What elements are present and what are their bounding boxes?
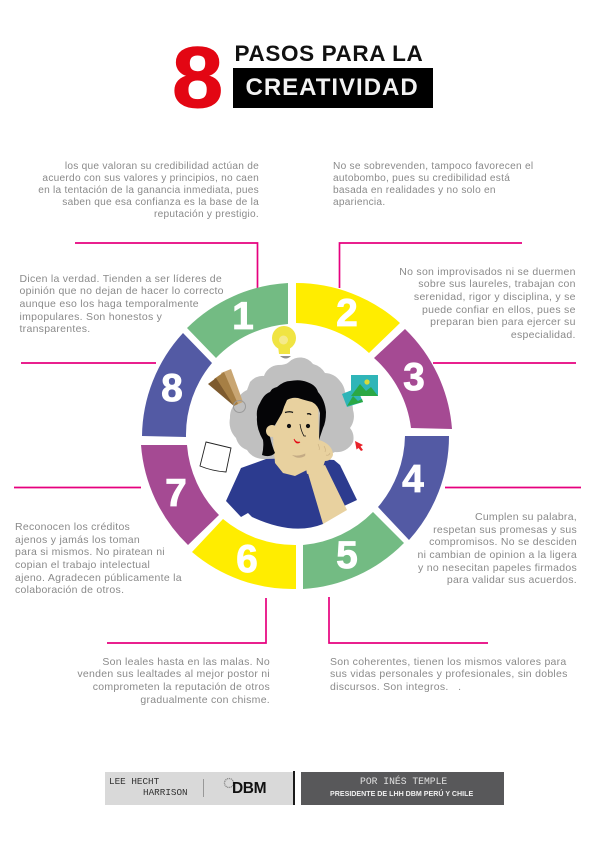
segment 6 <box>192 519 296 589</box>
segment 2 <box>296 283 400 353</box>
segment 8: 8 <box>161 367 183 410</box>
text: step 8: Dicen la verdad. Tienden a ser líderes de <box>20 272 222 284</box>
text: step 7: colaboración de otros. <box>15 584 124 596</box>
icon: red cursor <box>355 441 363 451</box>
mouth <box>294 439 300 443</box>
segment 7 <box>141 445 219 545</box>
text: step 8: transparentes. <box>20 323 90 335</box>
segment 6: 6 <box>236 538 258 581</box>
segment 3: 3 <box>403 356 425 399</box>
arm and fist <box>307 465 347 524</box>
text: step 6: Son leales hasta en las malas. No <box>102 656 270 668</box>
text: step 7: Reconocen los créditos <box>15 521 130 533</box>
nose <box>300 424 306 436</box>
segment 1 <box>187 283 288 358</box>
chin shadow <box>292 452 308 458</box>
icon: globe <box>224 778 234 788</box>
icon: blank paper <box>200 442 231 472</box>
icon: images <box>342 375 378 407</box>
text: step 3: serenidad, rigor y disciplina, y se <box>414 291 576 303</box>
face <box>273 398 319 456</box>
text: step 4: Cumplen su palabra, <box>475 511 577 523</box>
footer author bar <box>301 772 504 805</box>
segment 1: 1 <box>232 295 254 338</box>
text: step 3: especialidad. <box>511 329 576 341</box>
text: step 2 <box>333 161 533 208</box>
text: step 8 <box>20 272 224 335</box>
text: step 7: ajeno. Agradecen públicamente la <box>15 572 182 584</box>
text: step 1: acuerdo con sus valores y principios, no caen <box>42 173 259 184</box>
title line one: PASOS PARA LA <box>234 41 423 66</box>
icon: paint brush <box>208 369 246 412</box>
author name: POR INÉS TEMPLE <box>360 776 447 787</box>
text: step 3: preparan bien para ejercer su <box>430 316 576 328</box>
ear <box>266 425 278 437</box>
text: step 4: para validar sus acuerdos. <box>447 574 577 586</box>
connector lines <box>14 243 581 643</box>
title box: CREATIVIDAD <box>246 74 419 101</box>
title box <box>233 68 433 108</box>
text: step 6: venden sus lealtades al mejor postor ni <box>77 668 270 680</box>
text: step 7: ajenos y jamás los toman <box>15 534 140 546</box>
segment 5: 5 <box>336 534 358 577</box>
text: step 5 <box>330 656 568 693</box>
title number 8: 8 <box>172 30 223 126</box>
text: step 1: en la tentación de la ganancia inmediata, pues <box>38 185 259 196</box>
eyes and brows <box>287 424 291 428</box>
text: step 7: copian el trabajo intelectual <box>15 559 150 571</box>
text: step 8: impopulares. Son honestos y <box>20 311 162 323</box>
logo divider <box>202 779 205 797</box>
text: step 7 <box>15 521 182 596</box>
text: step 6: comprometen la reputación de otros <box>93 681 270 693</box>
segment 8 <box>142 333 212 437</box>
text: step 1: reputación y prestigio. <box>154 209 259 220</box>
text: step 2: No se sobrevenden, tampoco favorecen el <box>333 161 533 172</box>
text: step 4: respetan sus promesas y sus <box>433 524 577 536</box>
logo text: Lee Hecht: LEE HECHT <box>109 776 159 787</box>
icon: light bulb <box>272 326 296 358</box>
text: step 3: puede confiar en ellos, pues se <box>422 304 576 316</box>
text: step 4: compromisos. No se desciden <box>429 536 577 548</box>
text: step 3 <box>399 266 576 341</box>
shirt <box>226 458 357 529</box>
text: step 4: ni cambian de opinion a la ligera <box>417 549 577 561</box>
segment 4: 4 <box>402 458 424 501</box>
illustration: thinking woman <box>226 357 357 529</box>
text: step 5: Son coherentes, tienen los mismos valores para <box>330 656 567 668</box>
logo text: DBM: DBM <box>232 780 266 797</box>
footer divider bar <box>293 771 295 805</box>
logo text: Harrison: HARRISON <box>143 787 188 798</box>
text: step 1: los que valoran su credibilidad actúan de <box>65 161 259 172</box>
text: step 4 <box>417 511 577 586</box>
text: step 4: y no nesecitan papeles firmados <box>418 562 577 574</box>
text: step 7: para si mismos. No piratean ni <box>15 546 165 558</box>
author title: PRESIDENTE DE LHH DBM PERÚ Y CHILE <box>330 790 473 798</box>
hair <box>257 380 326 456</box>
text: step 5: discursos. Son integros. . <box>330 681 461 693</box>
text: step 5: sus vidas personales y profesionales, sin dobles <box>330 668 568 680</box>
text: step 2: apariencia. <box>333 197 385 208</box>
footer logo bar <box>105 772 293 805</box>
segment 5 <box>303 512 404 589</box>
text: step 1: saben que esa confianza es la base de la <box>62 197 259 208</box>
text: step 3: No son improvisados ni se duermen <box>399 266 576 278</box>
segment 7: 7 <box>165 472 187 515</box>
neck <box>273 440 315 476</box>
segment 3 <box>374 329 452 429</box>
text: step 2: autobombo, pues su credibilidad está <box>333 173 510 184</box>
text: step 2: basada en realidades y no solo en <box>333 185 496 196</box>
segment 2: 2 <box>336 292 358 335</box>
text: step 3: sobre sus laureles, trabajan con <box>418 278 576 290</box>
text: step 8: opinión que no dejan de hacer lo correcto <box>20 285 224 297</box>
segment 4 <box>378 436 449 540</box>
text: step 6: gradualmente con chisme. <box>140 694 270 706</box>
text: step 8: aunque eso los haga temporalmente <box>20 298 199 310</box>
text: step 6 <box>77 656 270 706</box>
text: step 1 <box>38 161 259 220</box>
thought cloud <box>230 357 354 459</box>
